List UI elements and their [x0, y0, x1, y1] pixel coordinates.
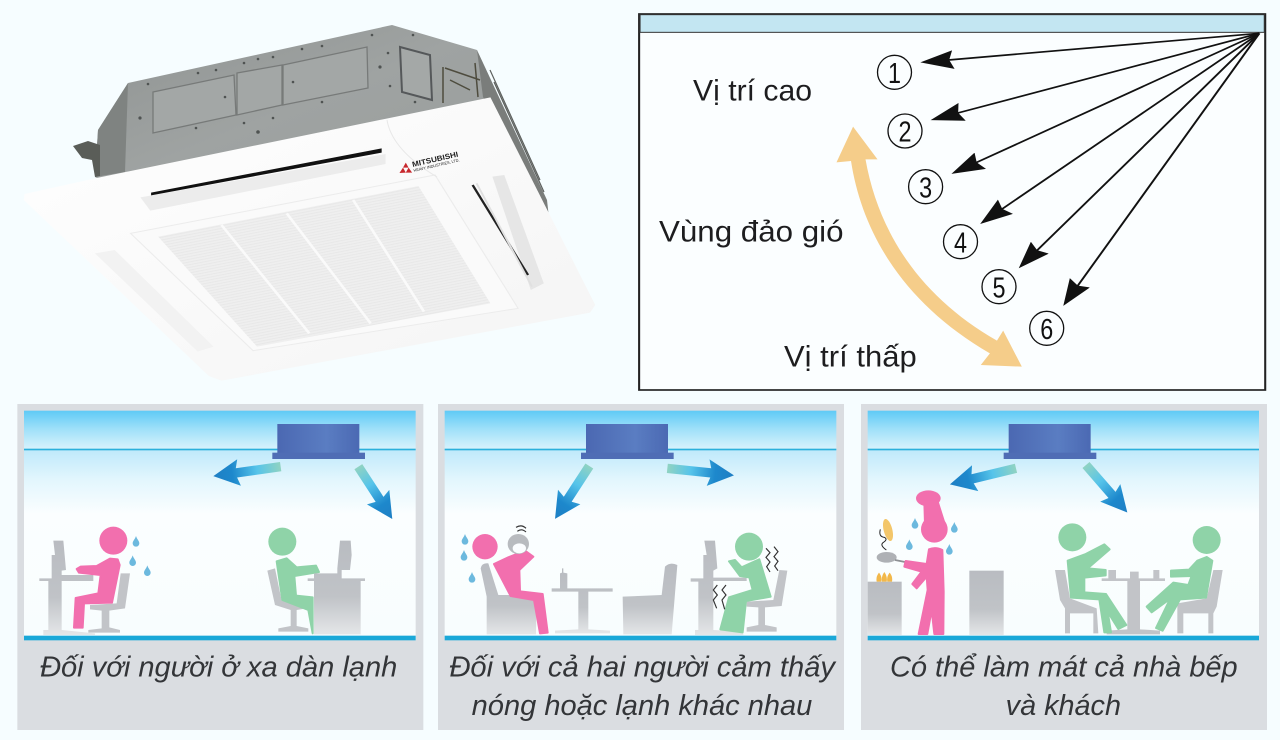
panel: kitchen and guests [861, 404, 1267, 730]
green guest right [1147, 526, 1221, 631]
circled position numbers: 3 [919, 172, 932, 204]
green guest left [1058, 523, 1126, 632]
floor line [445, 636, 836, 640]
caption: Đối với người ở xa dàn lạnh [40, 652, 397, 684]
stove [868, 582, 902, 635]
chair left [88, 573, 130, 633]
air flow arrow left [544, 459, 601, 526]
pancake in the air [880, 518, 895, 550]
room scene [24, 411, 416, 640]
label: low position: Vị trí thấp [784, 341, 917, 374]
chair right [1177, 570, 1223, 633]
air flow arrow left [947, 455, 1019, 497]
green person comfortable [268, 528, 319, 633]
air flow arrow right [1076, 456, 1137, 521]
white front panel [24, 97, 595, 381]
table [552, 568, 613, 633]
floor line [868, 636, 1259, 640]
panel: far from the indoor unit [17, 404, 423, 730]
room scene [445, 411, 836, 640]
chair left [1055, 570, 1098, 633]
ceiling line [868, 449, 1259, 450]
air flow arrow left [211, 453, 283, 489]
circled position numbers: 1 [888, 58, 901, 90]
Mitsubishi logo text: HEAVY INDUSTRIES, LTD. [413, 157, 460, 173]
panel: two people feel differently [438, 404, 844, 730]
panel corner seam [387, 120, 437, 177]
desk right [308, 541, 365, 634]
swing range double arrow [836, 127, 1022, 367]
caption: và khách [1006, 690, 1121, 722]
pink person hot [74, 527, 127, 628]
Mitsubishi logo text: MITSUBISHI [411, 150, 459, 169]
ceiling band [640, 15, 1264, 32]
sweat drops [906, 518, 958, 555]
panel inner frame [131, 175, 518, 351]
arrows to positions 1-6 [937, 33, 1259, 294]
product photo: ceiling cassette air conditioner [24, 25, 595, 381]
chair right [267, 568, 308, 632]
diagram shapes [639, 14, 1265, 390]
panel: air direction diagram [639, 14, 1265, 390]
air flow arrow right [666, 455, 735, 489]
cassette front drawing [24, 97, 595, 381]
logo triangles [399, 163, 412, 173]
pink person hot with fan [472, 526, 548, 633]
metal housing [73, 25, 549, 218]
desk right [691, 541, 747, 635]
return air grille [158, 186, 490, 347]
indoor unit [581, 424, 674, 459]
caption: nóng hoặc lạnh khác nhau [472, 690, 812, 722]
circled position numbers: 4 [954, 227, 967, 259]
caption [890, 652, 1238, 722]
right air outlet [473, 175, 544, 290]
circled position numbers: 5 [992, 272, 1006, 304]
sweat drops [129, 536, 151, 576]
indoor unit [1004, 424, 1096, 459]
flames [876, 572, 892, 582]
sweat drops [461, 534, 475, 583]
chair right [747, 570, 787, 632]
green person cold [720, 533, 771, 632]
caption: Có thể làm mát cả nhà bếp [890, 652, 1238, 684]
circled position numbers: 6 [1040, 314, 1053, 346]
ceiling line [24, 449, 416, 450]
caption: Đối với cả hai người cảm thấy [449, 652, 837, 684]
cabinet [969, 571, 1004, 635]
pink chef [904, 490, 948, 634]
frying pan [877, 552, 905, 563]
top air outlet [140, 148, 386, 211]
shiver marks [713, 547, 778, 609]
ceiling line [445, 449, 836, 450]
label: high position: Vị trí cao [693, 75, 812, 108]
desk left [39, 541, 95, 635]
circled position numbers [878, 55, 1064, 346]
label: swing zone: Vùng đảo gió [659, 216, 844, 249]
circled position numbers: 2 [898, 117, 912, 149]
caption [449, 652, 837, 722]
room scene [868, 411, 1259, 640]
floor line [24, 636, 416, 640]
table with cups [1102, 570, 1165, 634]
indoor unit [272, 424, 365, 459]
armchair left [481, 563, 537, 634]
air flow arrow right [347, 459, 403, 526]
left air outlet [95, 250, 214, 352]
armchair right [623, 564, 677, 634]
